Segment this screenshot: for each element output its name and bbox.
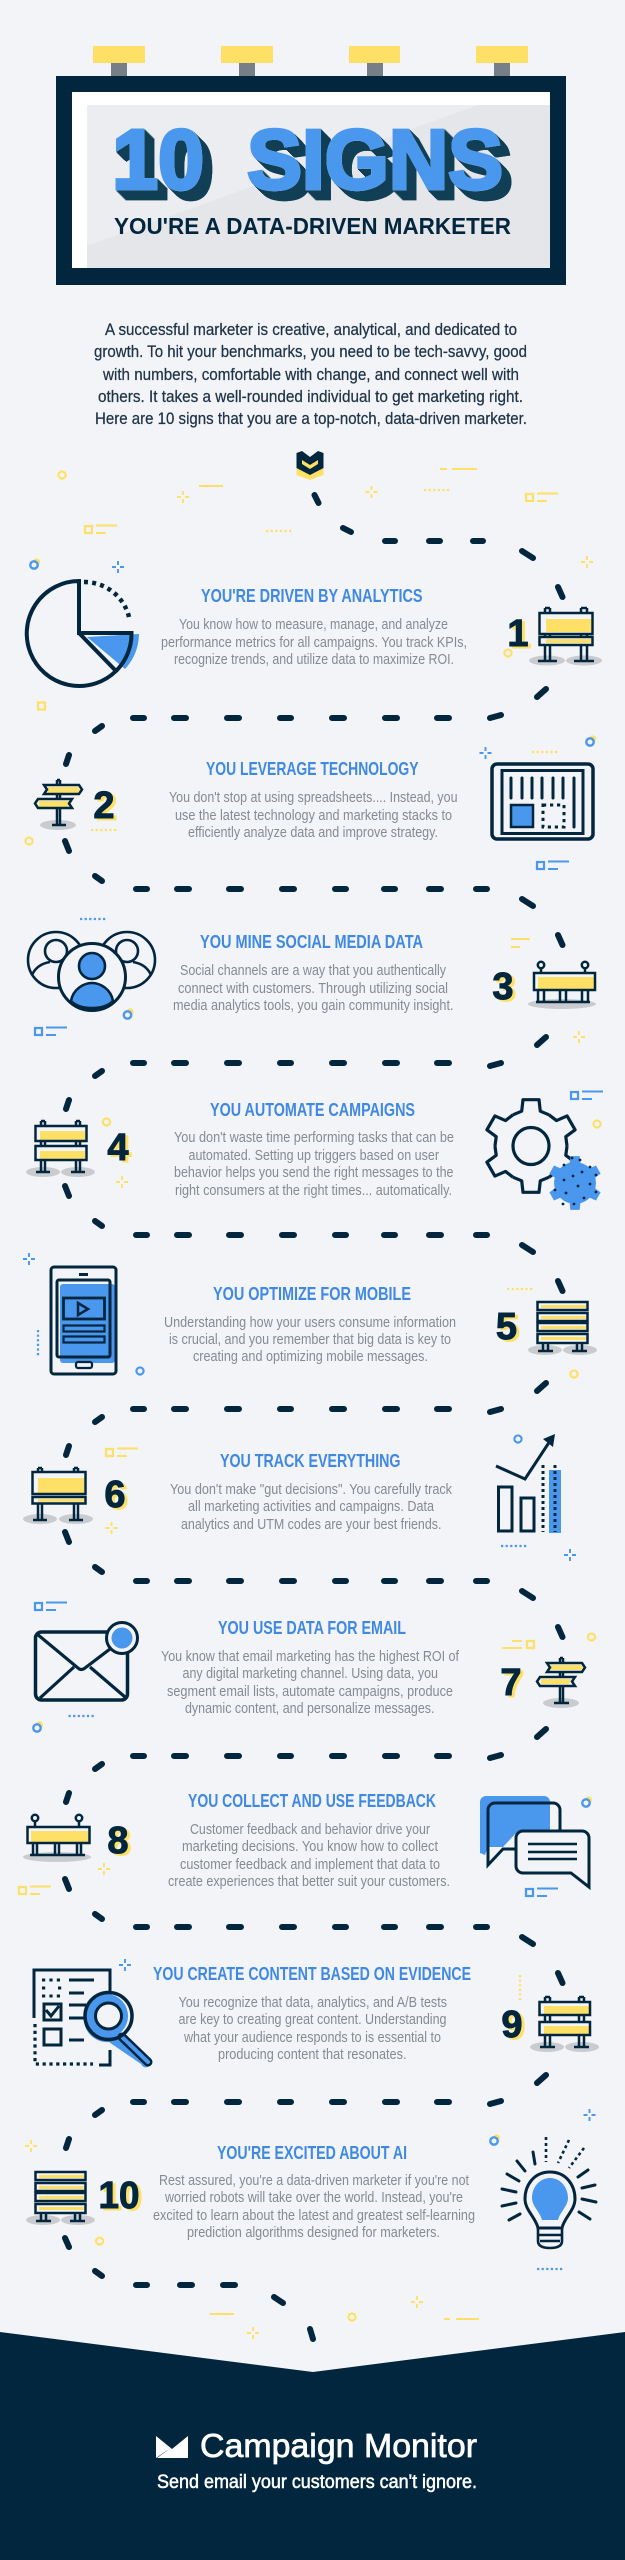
body text: right consumers at the right times... automatically. bbox=[175, 1183, 452, 1199]
body text: marketing decisions. You know how to collect bbox=[182, 1839, 438, 1855]
panel: sign 10 AI bbox=[26, 2137, 596, 2248]
body text: Understanding how your users consume information bbox=[164, 1315, 456, 1331]
icon: barrier bbox=[23, 1468, 93, 1524]
heading: YOU'RE EXCITED ABOUT AI bbox=[217, 2143, 407, 2163]
heading: YOU LEVERAGE TECHNOLOGY bbox=[206, 759, 418, 779]
body text: segment email lists, automate campaigns, produce bbox=[167, 1684, 453, 1700]
icon: barrier bbox=[529, 608, 602, 666]
icon: wide barrier bbox=[528, 962, 596, 1009]
body text: what your audience responds to is essential to bbox=[183, 2030, 441, 2046]
body text bbox=[174, 1130, 454, 1199]
heading: YOU OPTIMIZE FOR MOBILE bbox=[213, 1284, 411, 1304]
body text: is crucial, and you remember that big data is key to bbox=[169, 1332, 451, 1348]
subtitle: YOU'RE A DATA-DRIVEN MARKETER bbox=[114, 213, 511, 239]
body text: media analytics tools, you gain community insight. bbox=[173, 998, 454, 1014]
number 10: 10 bbox=[98, 2175, 140, 2217]
icon: lightbulb bbox=[502, 2137, 596, 2248]
panel: sign 7 email bbox=[36, 1618, 585, 1717]
panel: sign 4 automation bbox=[26, 1100, 603, 1210]
number 3: 3 bbox=[492, 966, 514, 1008]
number 7: 7 bbox=[500, 1662, 522, 1704]
body text: Rest assured, you're a data-driven marketer if you're not bbox=[159, 2173, 469, 2189]
icon: envelope with badge bbox=[36, 1622, 138, 1700]
icon: gears bbox=[482, 1100, 603, 1210]
icon: barrier bbox=[530, 1997, 599, 2052]
icon: stacked barrier bbox=[26, 2172, 95, 2225]
body text: You don't waste time performing tasks that can be bbox=[174, 1130, 454, 1146]
intro paragraph: others. It takes a well-rounded individual to get marketing right. bbox=[98, 388, 523, 406]
body text: behavior helps you send the right messages to the bbox=[174, 1165, 454, 1181]
body text: use the latest technology and marketing stacks to bbox=[175, 808, 452, 824]
body text: You don't stop at using spreadsheets.... Instead, you bbox=[169, 790, 458, 806]
billboard title bbox=[56, 46, 566, 285]
dashed path bbox=[65, 495, 562, 2339]
intro paragraph: growth. To hit your benchmarks, you need to be tech-savvy, good bbox=[94, 343, 527, 361]
body text bbox=[161, 617, 467, 668]
body text: create experiences that better suit your customers. bbox=[168, 1874, 450, 1890]
body text: any digital marketing channel. Using data, you bbox=[182, 1666, 438, 1682]
number 9: 9 bbox=[501, 2004, 523, 2046]
panel: sign 1 analytics bbox=[27, 581, 602, 686]
body text bbox=[178, 1995, 447, 2063]
panel: sign 6 tracking bbox=[23, 1434, 561, 1533]
heading: YOU MINE SOCIAL MEDIA DATA bbox=[200, 932, 423, 952]
body text bbox=[161, 1649, 460, 1717]
body text: worried robots will take over the world. Instead, you're bbox=[164, 2190, 463, 2206]
heading: YOU USE DATA FOR EMAIL bbox=[218, 1618, 406, 1638]
body text bbox=[153, 2173, 475, 2241]
panel: sign 8 feedback bbox=[23, 1791, 589, 1890]
tagline: Send email your customers can't ignore. bbox=[157, 2472, 477, 2493]
body text: analytics and UTM codes are your best friends. bbox=[181, 1517, 442, 1533]
body text bbox=[169, 790, 458, 841]
body text: recognize trends, and utilize data to maximize ROI. bbox=[174, 652, 454, 668]
title: 10 signs bbox=[112, 112, 503, 206]
intro paragraph: with numbers, comfortable with change, and connect well with bbox=[102, 366, 519, 384]
heading: YOU'RE DRIVEN BY ANALYTICS bbox=[201, 586, 422, 606]
body text bbox=[170, 1482, 453, 1533]
body text: automated. Setting up triggers based on user bbox=[188, 1148, 439, 1164]
icon: pie chart bbox=[27, 581, 139, 686]
panel: sign 3 social media bbox=[28, 932, 596, 1014]
body text: You know that email marketing has the highest ROI of bbox=[161, 1649, 460, 1665]
icon: stacked barrier bbox=[528, 1302, 597, 1355]
body text: are key to creating great content. Understanding bbox=[178, 2012, 446, 2028]
billboard frame bbox=[56, 76, 566, 285]
intro paragraph: Here are 10 signs that you are a top-notch, data-driven marketer. bbox=[95, 410, 527, 428]
body text: dynamic content, and personalize messages. bbox=[185, 1701, 434, 1717]
body text: connect with customers. Through utilizing social bbox=[178, 981, 448, 997]
body text bbox=[173, 963, 454, 1014]
icon: phone with video bbox=[51, 1267, 116, 1374]
logo: Campaign Monitor bbox=[156, 2427, 477, 2464]
heading: YOU AUTOMATE CAMPAIGNS bbox=[210, 1100, 415, 1120]
billboard lamps bbox=[93, 46, 528, 77]
body text: producing content that resonates. bbox=[218, 2047, 406, 2063]
number 5: 5 bbox=[496, 1306, 517, 1348]
body text: performance metrics for all campaigns. You track KPIs, bbox=[161, 635, 467, 651]
title: 10 signs: SIGNS bbox=[247, 112, 503, 206]
heading: YOU TRACK EVERYTHING bbox=[220, 1451, 400, 1471]
body text: creating and optimizing mobile messages. bbox=[193, 1349, 428, 1365]
icon: community people bbox=[28, 932, 155, 1010]
icon: wide barrier bbox=[23, 1815, 91, 1862]
icon: data tablet bbox=[492, 764, 593, 839]
body text: Customer feedback and behavior drive your bbox=[190, 1822, 430, 1838]
footer band bbox=[0, 2332, 625, 2560]
body text: Social channels are a way that you authentically bbox=[180, 963, 447, 979]
brand name: Campaign Monitor bbox=[200, 2427, 477, 2464]
icon: start chevron bbox=[296, 451, 324, 480]
number 1: 1 bbox=[507, 613, 529, 655]
body text: You recognize that data, analytics, and A/B tests bbox=[178, 1995, 447, 2011]
heading: YOU COLLECT AND USE FEEDBACK bbox=[188, 1791, 436, 1811]
body text: excited to learn about the latest and greatest self-learning bbox=[153, 2208, 475, 2224]
number 4: 4 bbox=[107, 1127, 129, 1169]
heading: YOU CREATE CONTENT BASED ON EVIDENCE bbox=[153, 1964, 471, 1984]
intro paragraph bbox=[94, 321, 527, 428]
title: 10 signs: 10 bbox=[112, 112, 204, 206]
icon: growth chart bbox=[496, 1434, 561, 1533]
panel: sign 9 content bbox=[34, 1964, 599, 2067]
body text: You know how to measure, manage, and analyze bbox=[179, 617, 448, 633]
billboard panel bbox=[72, 92, 550, 268]
number 6: 6 bbox=[104, 1474, 126, 1516]
icon: signpost bbox=[35, 780, 82, 830]
icon: barrier bbox=[26, 1121, 95, 1177]
icon: chat bubbles bbox=[480, 1796, 589, 1887]
body text: efficiently analyze data and improve strategy. bbox=[188, 825, 438, 841]
number 2: 2 bbox=[93, 785, 115, 827]
panel: sign 2 technology bbox=[35, 759, 593, 841]
icon: signpost bbox=[537, 1658, 585, 1708]
body text: prediction algorithms designed for marketers. bbox=[187, 2225, 440, 2241]
body text bbox=[164, 1315, 456, 1365]
panel: sign 5 mobile bbox=[51, 1267, 597, 1374]
decorative accents bbox=[19, 469, 603, 2339]
body text: customer feedback and implement that data to bbox=[180, 1857, 440, 1873]
body text: all marketing activities and campaigns. Data bbox=[188, 1499, 435, 1515]
icon: checklist with magnifier bbox=[34, 1970, 151, 2067]
body text bbox=[168, 1822, 450, 1890]
intro paragraph: A successful marketer is creative, analytical, and dedicated to bbox=[105, 321, 517, 339]
body text: You don't make "gut decisions". You carefully track bbox=[170, 1482, 453, 1498]
number 8: 8 bbox=[107, 1820, 129, 1862]
icon: envelope mark bbox=[156, 2436, 188, 2458]
